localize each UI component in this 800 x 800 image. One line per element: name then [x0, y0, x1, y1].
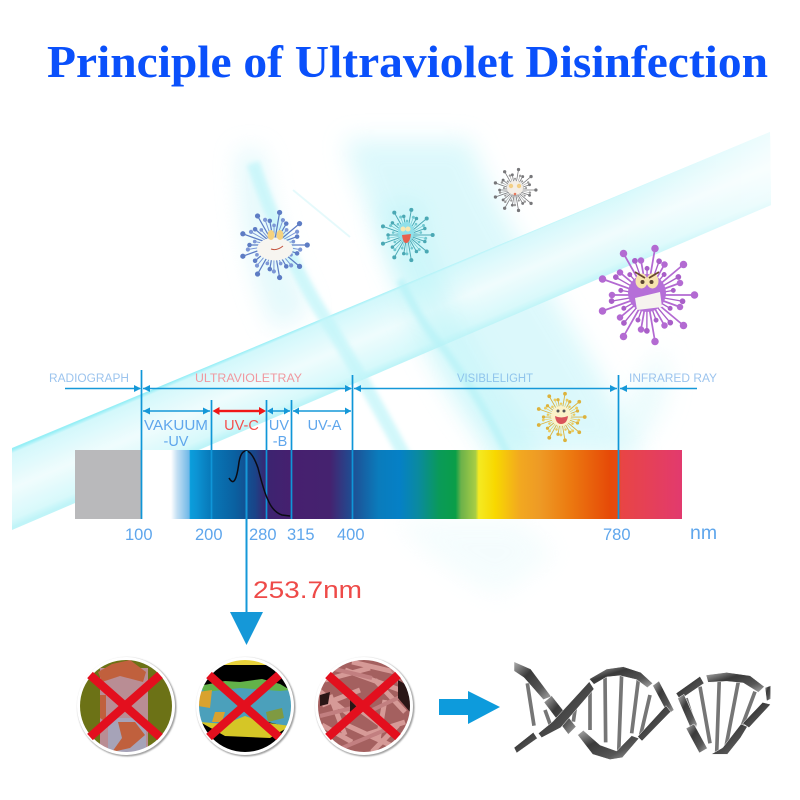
DNA strands — [514, 662, 771, 760]
band labels: -UV — [164, 434, 189, 450]
UV-C red arrow — [212, 407, 266, 415]
wavelength scale: 315 — [287, 526, 315, 544]
region labels: INFRARED RAY — [629, 373, 717, 385]
253.7nm label: 253.7nm — [253, 577, 362, 604]
wavelength scale: 780 — [603, 526, 631, 544]
253.7nm pointer arrow — [230, 451, 263, 645]
band labels: -B — [273, 434, 287, 450]
region labels — [49, 373, 717, 385]
virus: teal — [381, 208, 435, 262]
wavelength marker lines — [142, 370, 618, 519]
title: Principle of Ultraviolet Disinfection — [47, 37, 768, 87]
DNA helix — [514, 662, 771, 760]
spectrum bar — [75, 450, 682, 519]
circle 2: crossed-out microbe — [196, 657, 296, 756]
virus: purple — [599, 245, 698, 345]
wavelength scale: 280 — [249, 526, 277, 544]
wavelength scale: 200 — [195, 526, 223, 544]
virus: blue — [240, 210, 310, 280]
circle 1: crossed-out microbe — [77, 657, 176, 756]
band labels — [144, 418, 342, 450]
band range arrows — [143, 408, 351, 414]
region labels: VISIBLELIGHT — [457, 373, 533, 385]
wavelength scale: 400 — [337, 526, 365, 544]
band labels: UV — [269, 418, 289, 434]
band labels: UV-A — [308, 418, 342, 434]
band labels: VAKUUM — [144, 418, 208, 434]
region labels: ULTRAVIOLETRAY — [195, 373, 302, 385]
wavelength scale: 100 — [125, 526, 153, 544]
arrow to DNA — [439, 691, 500, 724]
wavelength scale — [125, 522, 717, 544]
circle 3: crossed-out microbe — [315, 657, 414, 756]
virus: yellow — [537, 392, 587, 442]
wavelength scale: nm — [690, 522, 717, 544]
DNA rungs — [527, 673, 755, 753]
band labels: UV-C — [224, 418, 259, 434]
absorption curve — [229, 451, 290, 516]
virus: grey — [494, 168, 538, 212]
background: light beams — [12, 132, 771, 595]
top range arrows — [65, 385, 697, 392]
region labels: RADIOGRAPH — [49, 373, 129, 385]
